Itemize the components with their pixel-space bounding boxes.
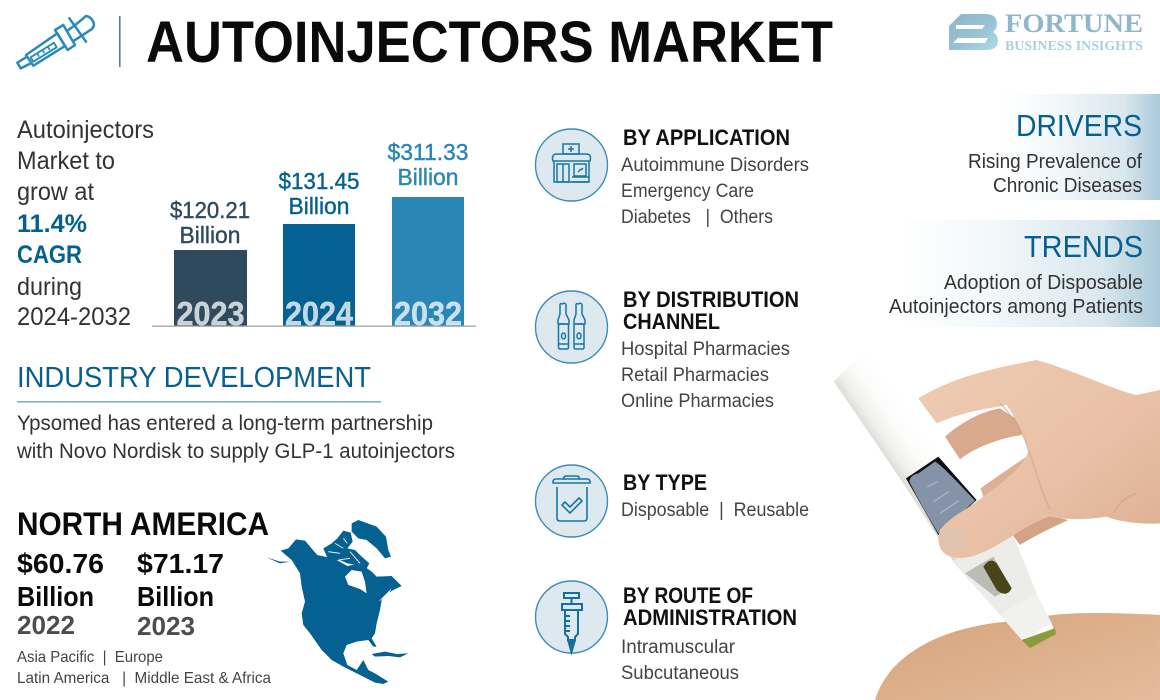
distribution list: Hospital Pharmacies [621, 339, 790, 360]
bar chart: 2032 [394, 295, 462, 332]
application list: Autoimmune Disorders [621, 155, 809, 176]
trends text: Adoption of Disposable [944, 272, 1143, 294]
application list [621, 155, 809, 228]
drivers heading: DRIVERS [1016, 108, 1142, 143]
north america stats: $60.76 [17, 548, 104, 579]
growth statement: Autoinjectors [17, 116, 154, 144]
heading: by route of administration [623, 583, 797, 630]
application list: Diabetes | Others [621, 207, 773, 228]
heading: by type: BY TYPE [623, 470, 707, 495]
drivers text [968, 151, 1142, 197]
panel: by application [536, 125, 809, 228]
icon: ampoules [536, 291, 608, 363]
other regions: Asia Pacific | Europe [17, 649, 163, 666]
route list: Subcutaneous [621, 663, 739, 684]
north america stats: Billion [17, 581, 94, 612]
north america stats: NORTH AMERICA [17, 506, 269, 542]
heading: by application: BY APPLICATION [623, 125, 790, 150]
heading: by distribution channel: BY DISTRIBUTION [623, 287, 799, 312]
distribution list [621, 339, 790, 412]
icon: disposal bin [536, 465, 608, 537]
growth statement: 11.4% [17, 210, 87, 238]
trends text: Autoinjectors among Patients [889, 296, 1143, 318]
logo: Fortune Business Insights [949, 9, 1143, 53]
bar chart: 2024 [285, 295, 354, 332]
trends heading: TRENDS [1024, 229, 1143, 264]
heading: by route of administration: ADMINISTRATION [623, 605, 797, 630]
logo: Fortune Business Insights: BUSINESS INSIGHTS [1005, 38, 1143, 53]
bar chart [152, 139, 476, 332]
icon: syringe [536, 581, 608, 653]
north america stats: Billion [137, 581, 214, 612]
panel: by route of administration [536, 581, 797, 684]
growth statement: Market to [17, 147, 115, 175]
growth statement: 2024-2032 [17, 303, 131, 331]
industry development text [16, 412, 455, 463]
industry development heading: INDUSTRY DEVELOPMENT [17, 362, 371, 394]
title: AUTOINJECTORS MARKET [146, 10, 833, 75]
application list: Emergency Care [621, 181, 754, 202]
trends text [889, 272, 1143, 318]
industry development text: with Novo Nordisk to supply GLP-1 autoinjectors [16, 440, 455, 463]
logo: Fortune Business Insights: FORTUNE [1005, 9, 1143, 38]
type list: Disposable | Reusable [621, 500, 809, 521]
distribution list: Retail Pharmacies [621, 365, 769, 386]
growth statement [17, 116, 154, 331]
route list: Intramuscular [621, 637, 736, 658]
north america stats [17, 506, 269, 641]
bar chart: $120.21 [170, 197, 250, 223]
bar chart: Billion [398, 164, 458, 190]
distribution list: Online Pharmacies [621, 391, 774, 412]
drivers text: Chronic Diseases [993, 175, 1142, 197]
heading: by distribution channel: CHANNEL [623, 309, 720, 334]
photo: hand using autoinjector [834, 353, 1160, 700]
north america stats: $71.17 [137, 548, 224, 579]
industry development text: Ypsomed has entered a long-term partnership [17, 412, 433, 435]
panel: by type [536, 465, 809, 537]
growth statement: during [17, 273, 82, 301]
growth statement: CAGR [17, 241, 82, 269]
north america stats: 2023 [137, 611, 195, 641]
other regions [17, 649, 271, 687]
panel: trends [889, 220, 1160, 327]
bar chart: 2023 [176, 295, 244, 332]
map: north america [267, 520, 408, 684]
north america stats: 2022 [17, 610, 75, 640]
bar chart: Billion [180, 222, 240, 248]
bar chart: $311.33 [388, 139, 468, 165]
bar chart: Billion [288, 193, 350, 219]
growth statement: grow at [17, 178, 94, 206]
header divider [119, 16, 121, 67]
other regions: Latin America | Middle East & Africa [17, 670, 271, 687]
route list [621, 637, 739, 684]
heading: by route of administration: BY ROUTE OF [623, 583, 753, 608]
icon: pharmacy [536, 129, 608, 201]
heading: by distribution channel [623, 287, 799, 334]
panel: by distribution channel [536, 287, 799, 412]
drivers text: Rising Prevalence of [968, 151, 1142, 173]
icon: autoinjector header [17, 16, 94, 68]
panel: drivers [968, 94, 1160, 200]
bar chart: $131.45 [278, 168, 360, 194]
